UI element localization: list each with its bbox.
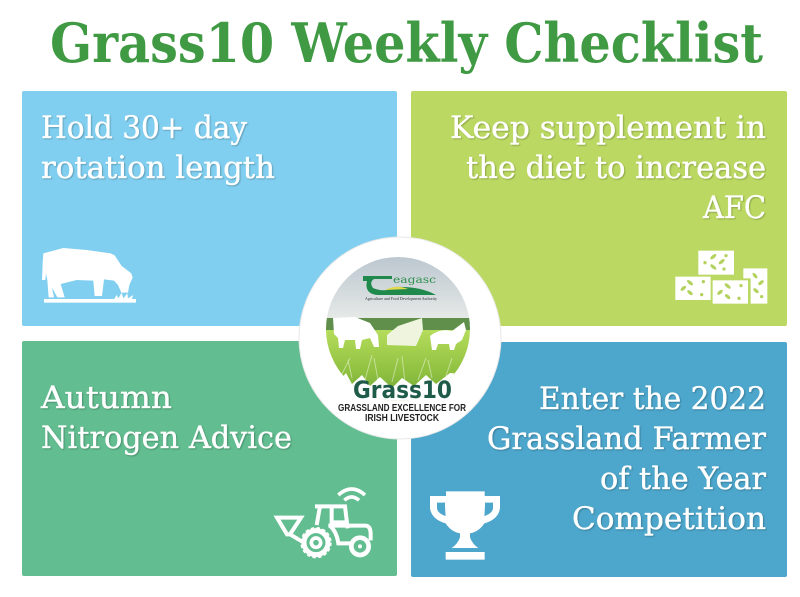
icon: silage bales bbox=[675, 251, 767, 304]
logo tagline: IRISH LIVESTOCK bbox=[365, 413, 440, 424]
logo badge bbox=[299, 237, 501, 439]
text: competition: Enter the 2022 bbox=[539, 381, 766, 417]
text: supplement: the diet to increase bbox=[466, 150, 766, 186]
logo tagline: GRASSLAND EXCELLENCE FOR bbox=[338, 403, 467, 414]
text: competition: of the Year bbox=[600, 461, 766, 497]
logo scene bbox=[326, 257, 470, 401]
text: competition bbox=[487, 381, 766, 537]
logo tagline bbox=[338, 403, 467, 424]
text: supplement bbox=[450, 110, 766, 226]
panel: supplement bbox=[411, 91, 787, 326]
logo wordmark: Grass10 bbox=[353, 376, 452, 404]
text: nitrogen: Nitrogen Advice bbox=[41, 420, 292, 456]
text: nitrogen bbox=[40, 380, 292, 456]
icon: tractor bbox=[277, 489, 371, 557]
icon: grazing cow bbox=[42, 248, 136, 303]
icon: trophy bbox=[430, 491, 500, 560]
panel: rotation length bbox=[22, 91, 397, 326]
text: supplement: AFC bbox=[702, 190, 766, 226]
text: nitrogen: Autumn bbox=[40, 380, 172, 416]
teagasc logo: eagasc bbox=[393, 275, 436, 286]
text: competition: Grassland Farmer bbox=[487, 421, 766, 457]
panel: nitrogen bbox=[22, 341, 397, 576]
panel: competition bbox=[411, 342, 787, 577]
text: rotation length: rotation length bbox=[41, 150, 275, 186]
teagasc logo: Agriculture and Food Development Authority bbox=[365, 296, 437, 301]
text: competition: Competition bbox=[572, 501, 766, 537]
text: supplement: Keep supplement in bbox=[450, 110, 766, 146]
text: rotation length: Hold 30+ day bbox=[41, 110, 247, 146]
teagasc logo bbox=[363, 275, 437, 301]
text: rotation length bbox=[41, 110, 275, 186]
logo cow and sheep bbox=[333, 317, 466, 350]
